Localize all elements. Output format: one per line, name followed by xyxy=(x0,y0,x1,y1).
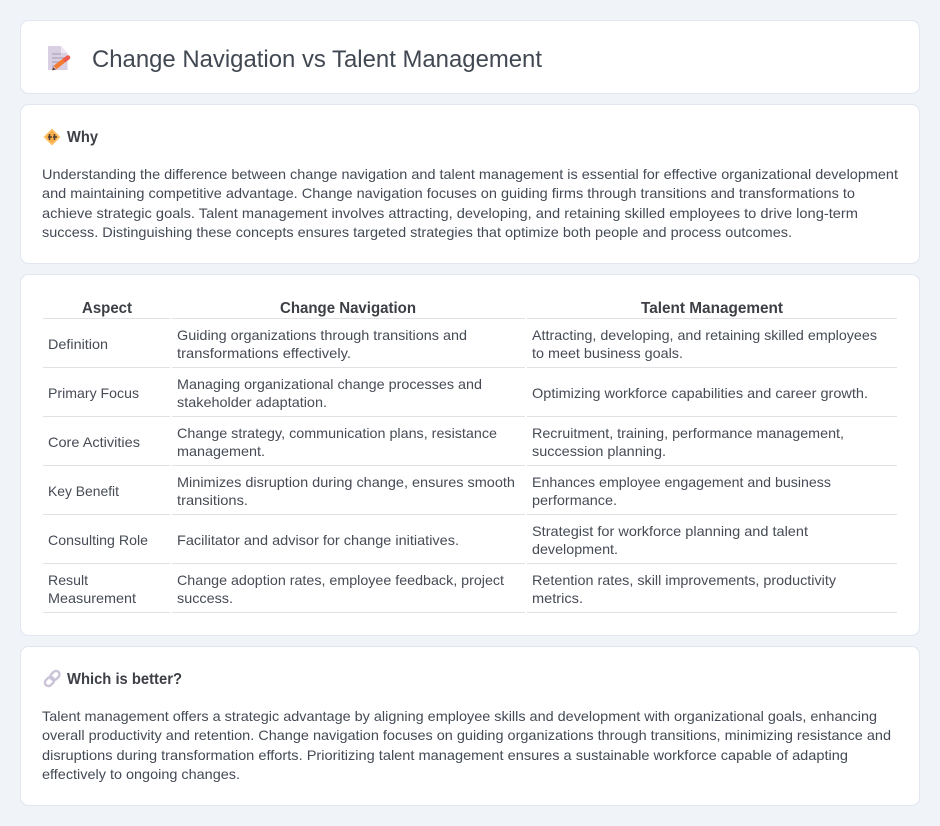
text block: which is better paragraph: effectively to ongoing changes. xyxy=(42,766,240,782)
row: core activities: Recruitment, training, performance management, xyxy=(532,425,844,441)
row: key benefit: Enhances employee engagement and business xyxy=(532,474,831,490)
row: consulting role: Consulting Role xyxy=(48,532,148,548)
text block: why paragraph: achieve strategic goals. Talent management involves attracting, developing, and retaining skilled employees to drive long-term xyxy=(42,205,858,221)
row: core activities: succession planning. xyxy=(532,443,666,459)
row: key benefit: Minimizes disruption during change, ensures smooth xyxy=(177,474,515,490)
panel: which is better xyxy=(20,646,920,806)
table header row: Aspect xyxy=(82,300,132,317)
row: definition: Attracting, developing, and retaining skilled employees xyxy=(532,327,877,343)
row: result measurement: metrics. xyxy=(532,590,583,606)
panel: comparison table xyxy=(20,274,920,636)
row: key benefit xyxy=(48,474,831,508)
row: definition: to meet business goals. xyxy=(532,345,683,361)
text block: which is better paragraph xyxy=(42,708,891,782)
table header row: Talent Management xyxy=(641,300,783,317)
row: primary focus xyxy=(48,376,868,410)
row: result measurement xyxy=(48,572,836,606)
row: core activities: Change strategy, communication plans, resistance xyxy=(177,425,497,441)
row: consulting role: Facilitator and advisor for change initiatives. xyxy=(177,532,459,548)
row: key benefit: Key Benefit xyxy=(48,483,119,499)
row: consulting role xyxy=(48,523,808,557)
text block: which is better paragraph: disruptions during transformation efforts. Prioritizing talent management ensures a sustainable workforce capable of adapting xyxy=(42,747,848,763)
row: primary focus: Optimizing workforce capabilities and career growth. xyxy=(532,385,868,401)
heading: which is better: Which is better? xyxy=(67,671,182,688)
row: primary focus: stakeholder adaptation. xyxy=(177,394,327,410)
icon: diamond sign xyxy=(44,130,60,144)
row: definition: Definition xyxy=(48,336,108,352)
text block: why paragraph xyxy=(42,166,898,240)
text block: why paragraph: and maintaining competitive advantage. Change navigation focuses on guiding firms through transitions and transformations to xyxy=(42,185,855,201)
icon: document with pencil xyxy=(48,46,68,70)
row: result measurement: Retention rates, skill improvements, productivity xyxy=(532,572,836,588)
heading: why: Why xyxy=(67,129,98,146)
table header row xyxy=(82,300,783,317)
title: Change Navigation vs Talent Management xyxy=(92,46,542,73)
row: core activities: Core Activities xyxy=(48,434,140,450)
panel: why xyxy=(20,104,920,264)
row: result measurement: success. xyxy=(177,590,233,606)
row: result measurement: Measurement xyxy=(48,590,136,606)
row: primary focus: Managing organizational change processes and xyxy=(177,376,482,392)
panel: title header xyxy=(20,20,920,94)
row: result measurement: Result xyxy=(48,572,88,588)
row: key benefit: performance. xyxy=(532,492,617,508)
row: key benefit: transitions. xyxy=(177,492,248,508)
row: consulting role: development. xyxy=(532,541,618,557)
row: result measurement: Change adoption rates, employee feedback, project xyxy=(177,572,504,588)
icon: chain link xyxy=(43,669,61,688)
row: primary focus: Primary Focus xyxy=(48,385,139,401)
row: consulting role: Strategist for workforce planning and talent xyxy=(532,523,808,539)
table header row: Change Navigation xyxy=(280,300,416,317)
text block: why paragraph: success. Distinguishing these concepts ensures targeted strategies that optimize both people and process outcomes. xyxy=(42,224,792,240)
row: definition: Guiding organizations through transitions and xyxy=(177,327,467,343)
row: core activities: management. xyxy=(177,443,265,459)
row: definition: transformations effectively. xyxy=(177,345,351,361)
text block: why paragraph: Understanding the difference between change navigation and talent management is essential for effective organizational development xyxy=(42,166,898,182)
text block: which is better paragraph: Talent management offers a strategic advantage by aligning employee skills and development with organizational goals, enhancing xyxy=(42,708,877,724)
text block: which is better paragraph: overall productivity and retention. Change navigation focuses on guiding organizations through transitions, minimizing resistance and xyxy=(42,727,891,743)
row: definition xyxy=(48,327,877,361)
row: core activities xyxy=(48,425,844,459)
